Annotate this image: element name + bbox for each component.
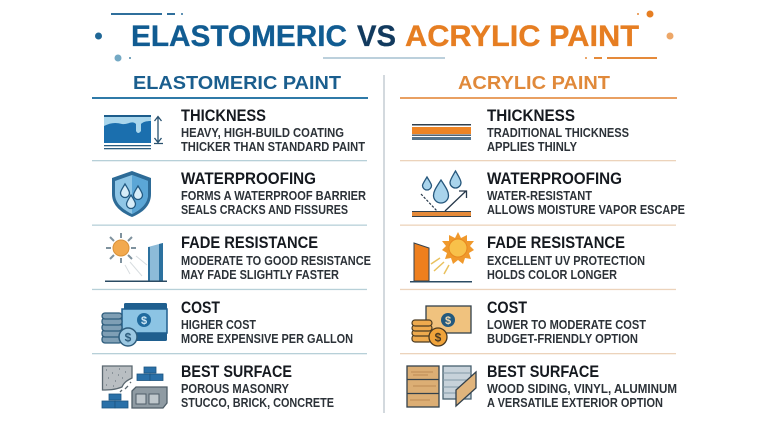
text: cost: COST — [487, 298, 528, 317]
text: fade resistance: FADE RESISTANCE — [487, 233, 625, 252]
text: fade resistance — [487, 233, 645, 282]
icon: banknote and coins — [412, 306, 471, 346]
text: thickness: TRADITIONAL THICKNESS — [487, 125, 629, 140]
text: fade resistance — [181, 233, 371, 282]
icon: wood siding and vinyl — [407, 366, 476, 407]
text: best surface: A VERSATILE EXTERIOR OPTION — [487, 395, 663, 410]
text: best surface — [487, 362, 677, 410]
icon: sun and orange panel — [410, 232, 474, 282]
decorative accents — [95, 10, 674, 62]
icon: banknote and coins: $ — [435, 330, 442, 344]
text: waterproofing: ALLOWS MOISTURE VAPOR ESCAPE — [487, 202, 685, 217]
icon: banknotes and coins — [102, 303, 167, 346]
panel: elastomeric paint — [92, 73, 371, 410]
text: fade resistance: FADE RESISTANCE — [181, 233, 318, 252]
text: thickness: THICKNESS — [487, 106, 575, 125]
text: thickness — [487, 106, 629, 154]
text: waterproofing: SEALS CRACKS AND FISSURES — [181, 202, 348, 217]
text: best surface: POROUS MASONRY — [181, 381, 289, 396]
text: fade resistance: MODERATE TO GOOD RESISTANCE — [181, 253, 371, 268]
text: cost — [181, 298, 353, 346]
text: cost: COST — [181, 298, 220, 317]
text: thickness — [181, 106, 365, 154]
text: waterproofing — [487, 169, 685, 217]
text: best surface: BEST SURFACE — [181, 362, 292, 381]
text: thickness: HEAVY, HIGH-BUILD COATING — [181, 125, 344, 140]
icon: banknote and coins: $ — [445, 315, 451, 327]
icon: shield with drops — [112, 171, 151, 217]
icon: sun and faded panel — [105, 233, 167, 282]
text: cost: HIGHER COST — [181, 317, 256, 332]
text: cost: LOWER TO MODERATE COST — [487, 317, 646, 332]
text: thickness: THICKNESS — [181, 106, 266, 125]
text: cost: MORE EXPENSIVE PER GALLON — [181, 331, 353, 346]
title — [131, 20, 639, 53]
text: waterproofing: WATER-RESISTANT — [487, 188, 592, 203]
text: waterproofing: FORMS A WATERPROOF BARRIER — [181, 188, 367, 203]
text: cost — [487, 298, 646, 346]
text: best surface: STUCCO, BRICK, CONCRETE — [181, 395, 334, 410]
icon: water drops with vapor arrow — [412, 171, 471, 217]
heading: acrylic paint: ACRYLIC PAINT — [458, 73, 610, 93]
text: cost: BUDGET-FRIENDLY OPTION — [487, 331, 638, 346]
heading: elastomeric paint: ELASTOMERIC PAINT — [133, 73, 341, 93]
text: best surface: WOOD SIDING, VINYL, ALUMINUM — [487, 381, 677, 396]
title: ELASTOMERIC — [131, 20, 347, 53]
text: waterproofing: WATERPROOFING — [487, 169, 622, 188]
panel: acrylic paint — [400, 73, 685, 410]
title: VS — [357, 20, 396, 53]
icon: banknotes and coins: $ — [125, 330, 132, 344]
icon: masonry — [102, 366, 167, 408]
text: best surface — [181, 362, 334, 410]
text: waterproofing: WATERPROOFING — [181, 169, 316, 188]
text: thickness: THICKER THAN STANDARD PAINT — [181, 139, 365, 154]
icon: thick coating — [104, 115, 163, 149]
text: best surface: BEST SURFACE — [487, 362, 599, 381]
text: fade resistance: HOLDS COLOR LONGER — [487, 267, 618, 282]
icon: thin coating — [412, 124, 471, 140]
text: thickness: APPLIES THINLY — [487, 139, 577, 154]
text: fade resistance: MAY FADE SLIGHTLY FASTER — [181, 267, 340, 282]
title: ACRYLIC PAINT — [405, 20, 639, 53]
icon: banknotes and coins: $ — [141, 315, 147, 327]
center divider — [383, 75, 385, 413]
text: fade resistance: EXCELLENT UV PROTECTION — [487, 253, 645, 268]
text: waterproofing — [181, 169, 367, 217]
